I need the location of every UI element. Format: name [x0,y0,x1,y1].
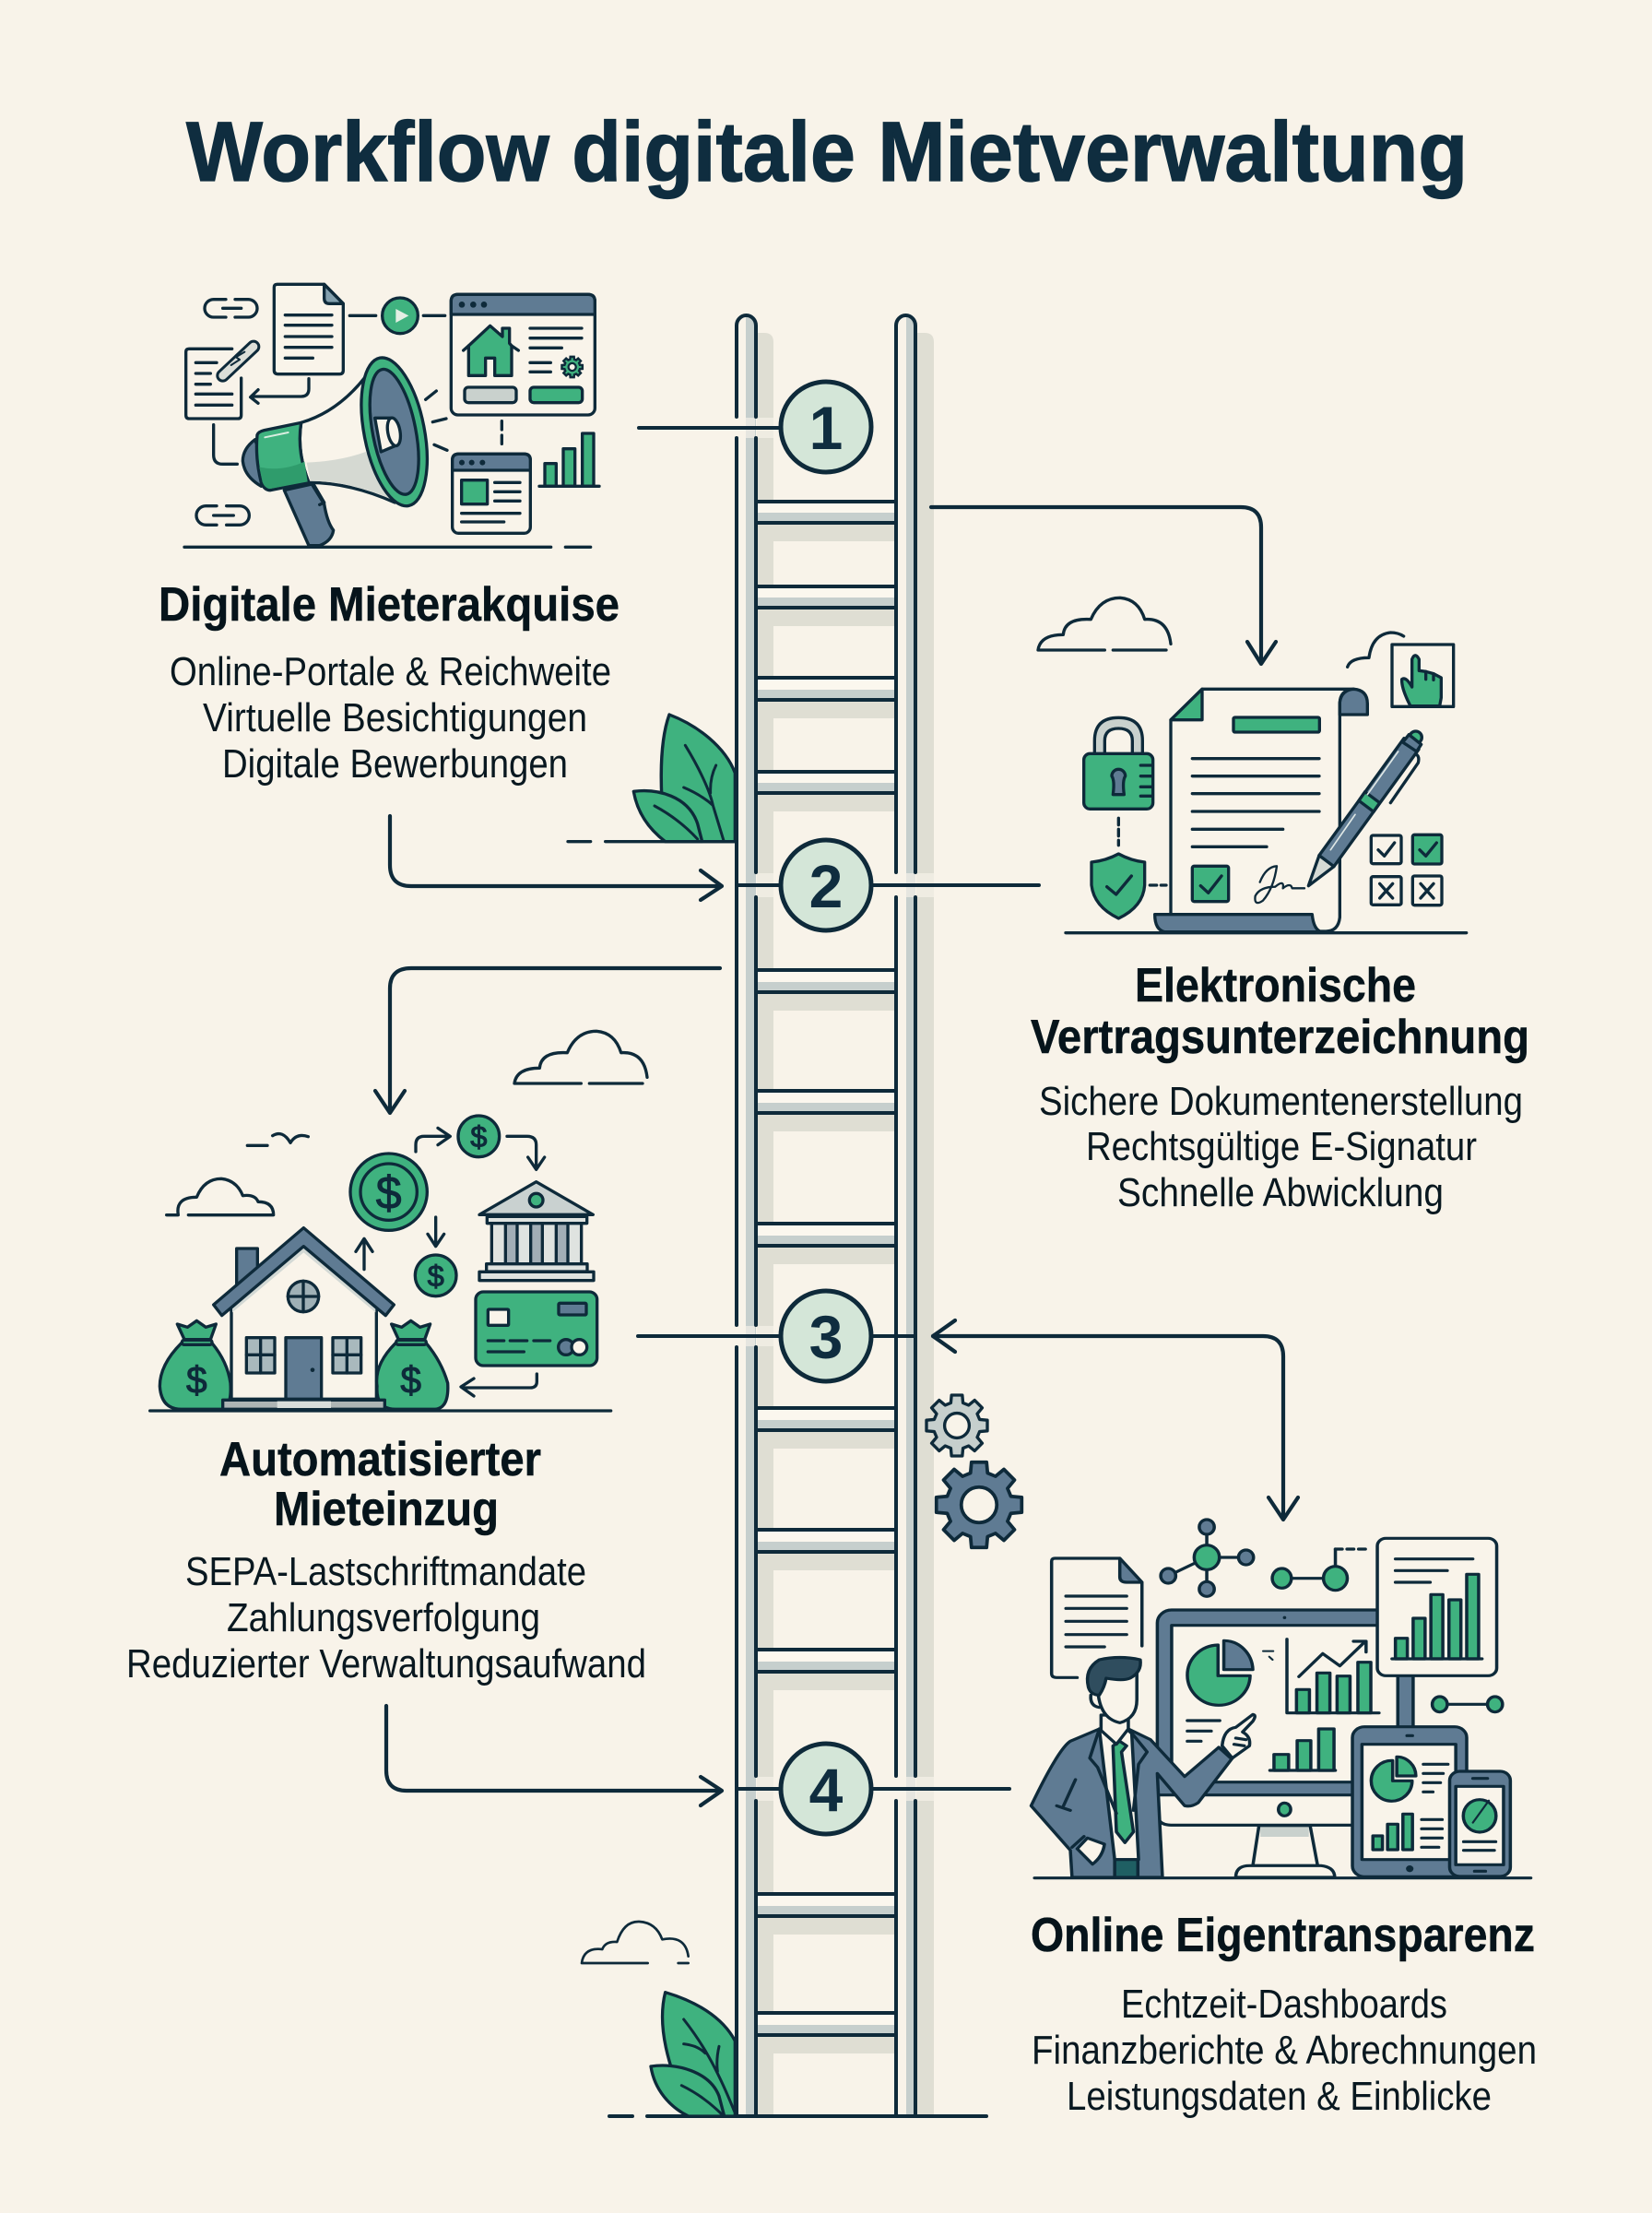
text block: Online-Portale & Reichweite [170,649,611,694]
number badge 4 [781,1744,871,1834]
text block: Virtuelle Besichtigungen [203,695,587,740]
heading: Online Eigentransparenz [1031,1909,1535,1962]
heading [1031,959,1529,1064]
arrow: ladder to step 3 [375,968,720,1113]
icon: house, coins, bank and card: $ [186,1359,207,1402]
text block: Digitale Bewerbungen [222,741,568,787]
arrow: step 3 and step 4 link [933,1320,1298,1520]
number badge 1 [781,382,871,472]
text block [1032,1982,1537,2119]
number badge 3 [781,1291,871,1381]
text block: Zahlungsverfolgung [227,1595,540,1640]
connector: step 1 to ladder [639,426,784,430]
icon: presenter with dashboards [1031,1520,1531,1878]
heading [219,1433,541,1536]
number badge 2: 2 [809,852,843,920]
panel: step 2 Elektronische Vertragsunterzeichnung [1031,598,1529,1215]
icon: house, coins, bank and card: $ [428,1259,444,1293]
arrow: ladder to step 2 [931,507,1276,664]
arrow: step 3 to ladder [386,1706,722,1805]
number badge 4: 4 [809,1756,844,1824]
connector: step 4 to ladder [738,1787,1009,1791]
title: Workflow digitale Mietverwaltung [186,105,1468,199]
text block: Finanzberichte & Abrechnungen [1032,2028,1537,2073]
text block [1039,1079,1523,1215]
cloud near ladder base [582,1922,689,1963]
arrow: step 1 to ladder [390,816,722,900]
number badge 3: 3 [809,1303,843,1371]
text block: Rechtsgültige E-Signatur [1086,1124,1477,1169]
ladder [737,315,935,2116]
text block: Reduzierter Verwaltungsaufwand [126,1641,646,1686]
gears [926,1395,1021,1547]
large gear [937,1462,1021,1547]
small gear [926,1395,987,1456]
heading: Automatisierter [219,1433,541,1486]
icon: contract with pen and lock [1038,598,1467,933]
heading: Elektronische [1135,959,1416,1012]
plant: upper leaves [568,715,735,842]
panel: step 4 Online Eigentransparenz [1031,1520,1537,2119]
ground line under ladder [609,2114,986,2118]
text block: Sichere Dokumentenerstellung [1039,1079,1523,1124]
number badge 1: 1 [809,394,843,462]
text block: SEPA-Lastschriftmandate [185,1549,586,1594]
icon: megaphone with web assets [184,284,599,547]
heading: Vertragsunterzeichnung [1031,1011,1529,1064]
connector: step 3 to ladder [638,1334,915,1338]
heading: Mieteinzug [274,1483,499,1536]
number badge 2 [781,840,871,930]
plant: lower leaves [651,1993,735,2116]
icon: house, coins, bank and card: $ [470,1119,487,1154]
text block: Leistungsdaten & Einblicke [1067,2074,1492,2119]
panel: step 3 Automatisierter Mieteinzug [126,1116,646,1686]
text block [126,1549,646,1686]
connector: step 2 to ladder [738,883,1039,887]
cloud above step 3 [514,1031,647,1083]
heading: Digitale Mieterakquise [159,578,620,632]
icon: house, coins, bank and card [150,1116,611,1411]
panel: step 1 Digitale Mieterakquise [159,284,620,787]
icon: house, coins, bank and card: $ [376,1167,402,1219]
icon: house, coins, bank and card: $ [400,1359,421,1402]
text block [170,649,611,787]
text block: Echtzeit-Dashboards [1121,1982,1447,2027]
text block: Schnelle Abwicklung [1117,1170,1444,1215]
